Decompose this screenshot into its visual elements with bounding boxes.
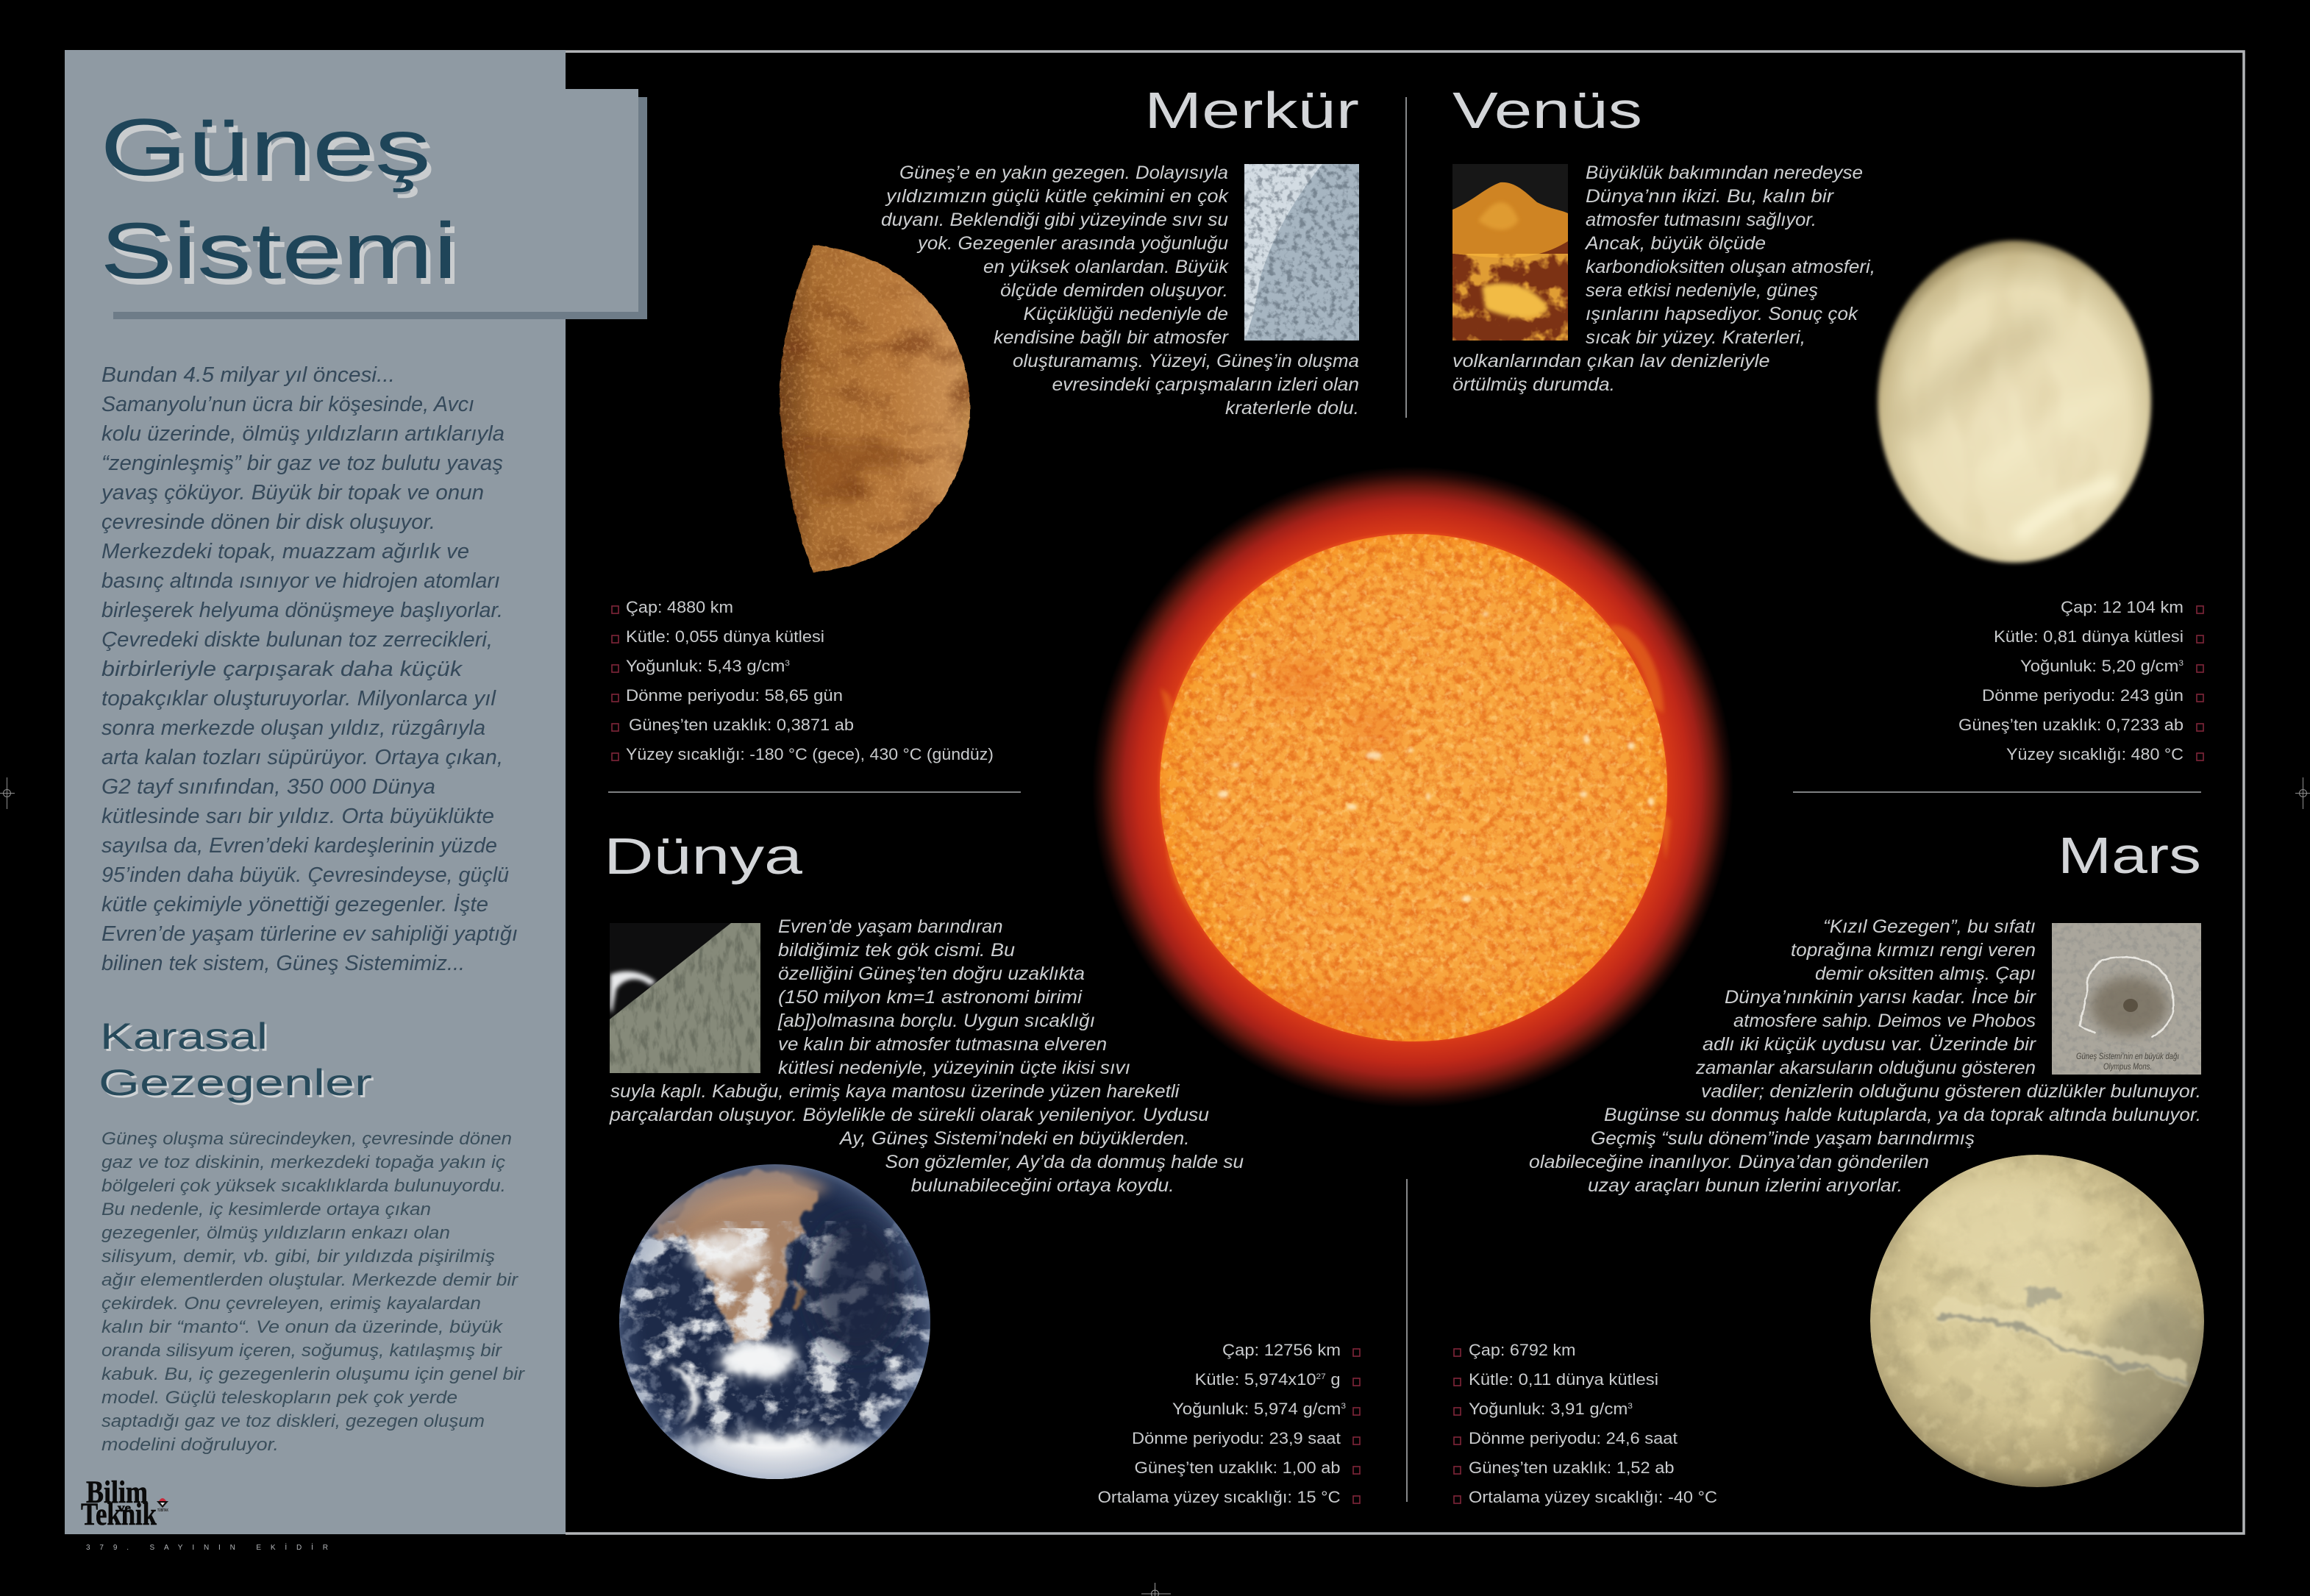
clouds and ice <box>644 1233 894 1495</box>
Earth section <box>604 827 1360 1506</box>
text: Earth: bildiğimiz tek gök cismi. Bu <box>778 940 1015 961</box>
terrestrial planets text block: Bu nedenle, iç kesimlerde ortaya çıkan <box>101 1200 431 1219</box>
stats: Mercury: Kütle: 0,055 dünya kütlesi <box>626 627 824 646</box>
bright spots <box>1218 612 1654 902</box>
planet: Mercury <box>776 243 974 575</box>
stats: Mars: Çap: 6792 km <box>1469 1341 1575 1359</box>
text: Earth: Evren’de yaşam barındıran <box>778 916 1003 937</box>
text: Earth: suyla kaplı. Kabuğu, erimiş kaya mantosu üzerinde yüzen hareketli <box>610 1081 1180 1102</box>
text: Mercury: yıldızımızın güçlü kütle çekimini en çok <box>885 186 1230 207</box>
text: Mars: Bugünse su donmuş halde kutuplarda, ya da toprak altında bulunuyor. <box>1604 1105 2201 1125</box>
text: Mars <box>1529 916 2201 1196</box>
logo: Bilim ve Teknik: Bilim <box>86 1475 148 1510</box>
terrestrial planets text block: bölgeleri çok yüksek sıcaklıklarda bulunuyordu. <box>101 1176 506 1196</box>
text: Mercury: evresindeki çarpışmaların izleri olan <box>1052 374 1359 395</box>
intro text block: Merkezdeki topak, muazzam ağırlık ve <box>101 540 469 563</box>
title: Güneş Sistemi <box>100 102 462 301</box>
heading: Karasal Gezegenler: Gezegenler <box>101 1064 374 1105</box>
text: Mars: zamanlar akarsuların olduğunu gösteren <box>1695 1058 2036 1078</box>
stats: Venus: Dönme periyodu: 243 gün <box>1982 686 2184 705</box>
stats: Earth: Yoğunluk: 5,974 g/cm <box>1172 1400 1327 1418</box>
Valles Marineris <box>1938 1283 2188 1381</box>
text: Earth: parçalardan oluşuyor. Böylelikle de sürekli olarak yenileniyor. Uydusu <box>609 1105 1209 1125</box>
intro text block: topakçıklar oluşturuyorlar. Milyonlarca yıl <box>101 687 497 710</box>
stats: Earth: Ortalama yüzey sıcaklığı: 15 °C <box>1098 1488 1341 1506</box>
logo: Bilim ve Teknik: Teknik <box>81 1497 157 1532</box>
registration mark: right <box>2295 777 2310 809</box>
stats: Mars: Ortalama yüzey sıcaklığı: -40 °C <box>1469 1488 1717 1506</box>
intro text block: Samanyolu’nun ücra bir köşesinde, Avcı <box>101 393 474 416</box>
land: Africa and Arabia <box>647 1169 824 1342</box>
stats: Mercury: Dönme periyodu: 58,65 gün <box>626 686 843 705</box>
stats: Venus: Güneş’ten uzaklık: 0,7233 ab <box>1958 716 2184 734</box>
Venus section <box>1452 82 2203 763</box>
text: Mercury: Küçüklüğü nedeniyle de <box>1024 304 1228 324</box>
intro text block: G2 tayf sınıfından, 350 000 Dünya <box>101 775 435 799</box>
intro text block: basınç altında ısınıyor ve hidrojen atomları <box>101 569 500 593</box>
terrestrial planets text block: gaz ve toz diskinin, merkezdeki topağa yakın iç <box>101 1153 505 1172</box>
terrestrial planets text block: kalın bir “manto“. Ve onun da üzerinde, büyük <box>101 1317 504 1337</box>
terrestrial planets text block: silisyum, demir, vb. gibi, bir yıldızda pişirilmiş <box>101 1247 495 1267</box>
heading: Mars: Mars <box>2058 827 2201 884</box>
logo: Bilim ve Teknik <box>81 1475 168 1532</box>
stats: Venus <box>1958 598 2203 763</box>
intro text block: sayılsa da, Evren’deki kardeşlerinin yüzde <box>101 834 497 858</box>
logo: Bilim ve Teknik: ve <box>118 1502 131 1514</box>
terrestrial planets text block: çekirdek. Onu çevreleyen, erimiş kayalardan <box>101 1294 481 1314</box>
intro text block: “zenginleşmiş” bir gaz ve toz bulutu yavaş <box>101 452 503 475</box>
text: Mars: Dünya’nınkinin yarısı kadar. İnce bir <box>1725 987 2037 1008</box>
stats: Mars: Yoğunluk: 3,91 g/cm <box>1469 1400 1615 1418</box>
thumbnail: Earth from Moon <box>610 923 760 1073</box>
text: Mars: uzay araçları bunun izlerini arıyorlar. <box>1588 1175 1903 1196</box>
text: Earth: Ay, Güneş Sistemi’ndeki en büyüklerden. <box>838 1128 1190 1149</box>
title: Güneş Sistemi: Sistemi <box>100 206 457 295</box>
sun <box>1092 466 1733 1108</box>
terrestrial planets text block: model. Güçlü teleskopların pek çok yerde <box>101 1388 457 1408</box>
text: Venus: Ancak, büyük ölçüde <box>1584 233 1766 254</box>
stats: Mercury: Yüzey sıcaklığı: -180 °C (gece), 430 °C (gündüz) <box>626 745 994 763</box>
planet: Venus <box>1875 239 2155 566</box>
terrestrial planets text block: ağır elementlerden oluştular. Merkezde demir bir <box>101 1270 518 1290</box>
intro text block: birbirleriyle çarpışarak daha küçük <box>101 658 463 681</box>
intro text block: arta kalan tozları süpürüyor. Ortaya çıkan, <box>101 746 503 769</box>
stats: Mercury: 3 <box>785 659 790 668</box>
stats: Venus: 3 <box>2178 659 2184 668</box>
text: Mercury: oluşturamamış. Yüzeyi, Güneş’in oluşma <box>1013 351 1359 371</box>
planet: Earth <box>618 1162 934 1495</box>
heading: Karasal Gezegenler: Gezegenler <box>99 1062 372 1103</box>
title box <box>100 89 647 319</box>
stats: Venus: Yüzey sıcaklığı: 480 °C <box>2006 745 2184 763</box>
text: Venus: volkanlarından çıkan lav denizleriyle <box>1452 351 1769 371</box>
text: Venus: sıcak bir yüzey. Kraterleri, <box>1586 327 1805 348</box>
terrestrial planets text block: kabuk. Bu, iç gezegenlerin oluşumu için genel bir <box>101 1364 525 1384</box>
thumbnail: Olympus Mons <box>2052 923 2201 1075</box>
divider lines <box>608 97 2201 1502</box>
thumbnail caption: Güneş Sistemi’nin en büyük dağı <box>2076 1051 2179 1061</box>
text: Mars: “Kızıl Gezegen”, bu sıfatı <box>1823 916 2036 937</box>
prominences <box>1161 625 1671 930</box>
thumbnail caption: Olympus Mons. <box>2103 1061 2152 1072</box>
text: Mars: Geçmiş “sulu dönem”inde yaşam barındırmış <box>1591 1128 1975 1149</box>
Mercury section <box>612 82 1359 763</box>
stats: Earth: Dönme periyodu: 23,9 saat <box>1132 1429 1341 1447</box>
thumbnail: Mercury surface <box>1244 164 1359 341</box>
text: Venus: karbondioksitten oluşan atmosferi, <box>1586 257 1875 277</box>
text: Venus: örtülmüş durumda. <box>1452 374 1615 395</box>
intro text block: kolu üzerinde, ölmüş yıldızların artıklarıyla <box>101 422 505 446</box>
text: Earth: ve kalın bir atmosfer tutmasına elveren <box>778 1034 1107 1055</box>
text: Mercury: Güneş’e en yakın gezegen. Dolayısıyla <box>899 163 1228 183</box>
terrestrial planets text block: Güneş oluşma sürecindeyken, çevresinde dönen <box>101 1129 512 1149</box>
intro text block: çevresinde dönen bir disk oluşuyor. <box>101 510 435 534</box>
intro text block: Evren’de yaşam türlerine ev sahipliği yaptığı <box>101 922 518 946</box>
text: Mars: toprağına kırmızı rengi veren <box>1791 940 2036 961</box>
stats: Mercury: Yoğunluk: 5,43 g/cm <box>626 657 772 675</box>
terrestrial planets text block: gezegenler, ölmüş yıldızların enkazı olan <box>101 1223 450 1243</box>
intro text block: kütlesinde sarı bir yıldız. Orta büyüklükte <box>101 805 494 828</box>
intro text block: birleşerek helyuma dönüşmeye başlıyorlar. <box>101 599 503 622</box>
issue note: 379. SAYININ EKİDİR <box>86 1542 328 1552</box>
text: Mercury: ölçüde demirden oluşuyor. <box>1000 280 1228 301</box>
Mars section <box>1454 827 2217 1506</box>
intro text block <box>100 363 518 975</box>
text: Mercury: yok. Gezegenler arasında yoğunluğu <box>916 233 1228 254</box>
stats: Mercury: Güneş’ten uzaklık: 0,3871 ab <box>629 716 854 734</box>
terrestrial planets text block: modelini doğruluyor. <box>101 1435 279 1455</box>
panel: sidebar <box>65 50 647 1534</box>
stats: Earth <box>1098 1341 1360 1506</box>
text: Earth: bulunabileceğini ortaya koydu. <box>911 1175 1174 1196</box>
intro text block: 95’inden daha büyük. Çevresindeyse, güçlü <box>101 863 509 887</box>
registration mark: left <box>0 777 15 809</box>
text: Venus <box>1452 163 1875 395</box>
intro text block: Çevredeki diskte bulunan toz zerrecikleri, <box>101 628 493 652</box>
text: Earth: kütlesi nedeniyle, yüzeyinin üçte ikisi sıvı <box>778 1058 1130 1078</box>
stats: Earth: Güneş’ten uzaklık: 1,00 ab <box>1134 1458 1340 1477</box>
title: Güneş Sistemi: Güneş <box>100 102 431 193</box>
stats: Venus: Yoğunluk: 5,20 g/cm <box>2020 657 2167 675</box>
text: Earth: [ab])olmasına borçlu. Uygun sıcaklığı <box>777 1011 1095 1031</box>
text: Venus: atmosfer tutmasını sağlıyor. <box>1586 210 1817 230</box>
registration mark: bottom <box>1141 1583 1171 1596</box>
text: Venus: sera etkisi nedeniyle, güneş <box>1586 280 1818 301</box>
stats: Mercury <box>612 598 994 763</box>
stats: Mercury: Çap: 4880 km <box>626 598 733 616</box>
text: Mercury: duyanı. Beklendiği gibi yüzeyinde sıvı su <box>881 210 1228 230</box>
stats: Mars: Güneş’ten uzaklık: 1,52 ab <box>1469 1458 1674 1477</box>
intro text block: sonra merkezde oluşan yıldız, rüzgârıyla <box>101 716 485 740</box>
text: Mars: olabileceğine inanılıyor. Dünya’dan gönderilen <box>1529 1152 1929 1172</box>
intro text block: bilinen tek sistem, Güneş Sistemimiz... <box>101 952 465 975</box>
page frame <box>566 51 2244 1533</box>
text: Mars: vadiler; denizlerin olduğunu gösteren düzlükler bulunuyor. <box>1701 1081 2201 1102</box>
title: Güneş Sistemi: Güneş <box>104 108 435 199</box>
stats: Mars: 3 <box>1628 1402 1633 1411</box>
dark ocean <box>809 1217 905 1357</box>
terrestrial planets text block: oranda silisyum içeren, soğumuş, katılaşmış bir <box>101 1341 502 1361</box>
heading: Karasal Gezegenler: Karasal <box>100 1016 268 1057</box>
stats: Venus: Kütle: 0,81 dünya kütlesi <box>1994 627 2184 646</box>
stats: Earth: Çap: 12756 km <box>1222 1341 1341 1359</box>
planet: Mars <box>1868 1153 2217 1489</box>
heading: Karasal Gezegenler: Karasal <box>102 1018 270 1059</box>
text: Venus: ışınlarını hapsediyor. Sonuç çok <box>1586 304 1859 324</box>
text: Venus: Büyüklük bakımından neredeyse <box>1586 163 1863 183</box>
stats: Earth: 3 <box>1341 1402 1346 1411</box>
title: Güneş Sistemi: Sistemi <box>104 212 462 301</box>
text: Mars: adlı iki küçük uydusu var. Üzerinde bir <box>1703 1034 2037 1055</box>
stats: Earth: Kütle: 5,974x10 <box>1195 1370 1308 1389</box>
heading: Venüs: Venüs <box>1452 82 1642 139</box>
text: Earth: Son gözlemler, Ay’da da donmuş halde su <box>885 1152 1244 1172</box>
text: Mercury: kraterlerle dolu. <box>1225 398 1359 418</box>
terrestrial planets text block: saptadığı gaz ve toz diskleri, gezegen oluşum <box>101 1411 485 1431</box>
heading: Dünya: Dünya <box>604 827 802 885</box>
thumbnail: Venus volcano <box>1452 164 1568 341</box>
stats: Earth: 27 <box>1316 1372 1326 1381</box>
text: Earth: (150 milyon km=1 astronomi birimi <box>778 987 1083 1008</box>
terrestrial planets text block <box>101 1129 525 1455</box>
text: Earth: özelliğini Güneş’ten doğru uzaklıkta <box>778 963 1085 984</box>
stats: Mars: Kütle: 0,11 dünya kütlesi <box>1469 1370 1658 1389</box>
text: Mercury: kendisine bağlı bir atmosfer <box>994 327 1230 348</box>
stats: Mars: Dönme periyodu: 24,6 saat <box>1469 1429 1678 1447</box>
stats: Mars <box>1454 1341 1717 1506</box>
text: Mercury <box>881 163 1359 418</box>
heading: Merkür: Merkür <box>1144 82 1359 139</box>
icon: Tübitak: TÜBİTAK <box>157 1508 168 1513</box>
text: Earth <box>609 916 1244 1196</box>
text: Mars: atmosfere sahip. Deimos ve Phobos <box>1733 1011 2036 1031</box>
intro text block: Bundan 4.5 milyar yıl öncesi... <box>101 363 395 387</box>
text: Mercury: en yüksek olanlardan. Büyük <box>983 257 1230 277</box>
intro text block: kütle çekimiyle yönettiği gezegenler. İşte <box>101 893 488 916</box>
text: Mars: demir oksitten almış. Çapı <box>1815 963 2036 984</box>
thumbnail caption <box>2076 1051 2179 1072</box>
heading: Karasal Gezegenler <box>99 1016 374 1105</box>
text: Venus: Dünya’nın ikizi. Bu, kalın bir <box>1586 186 1835 207</box>
stats: Venus: Çap: 12 104 km <box>2061 598 2184 616</box>
intro text block: yavaş çöküyor. Büyük bir topak ve onun <box>100 481 484 505</box>
stats: Earth: g <box>1326 1370 1341 1389</box>
